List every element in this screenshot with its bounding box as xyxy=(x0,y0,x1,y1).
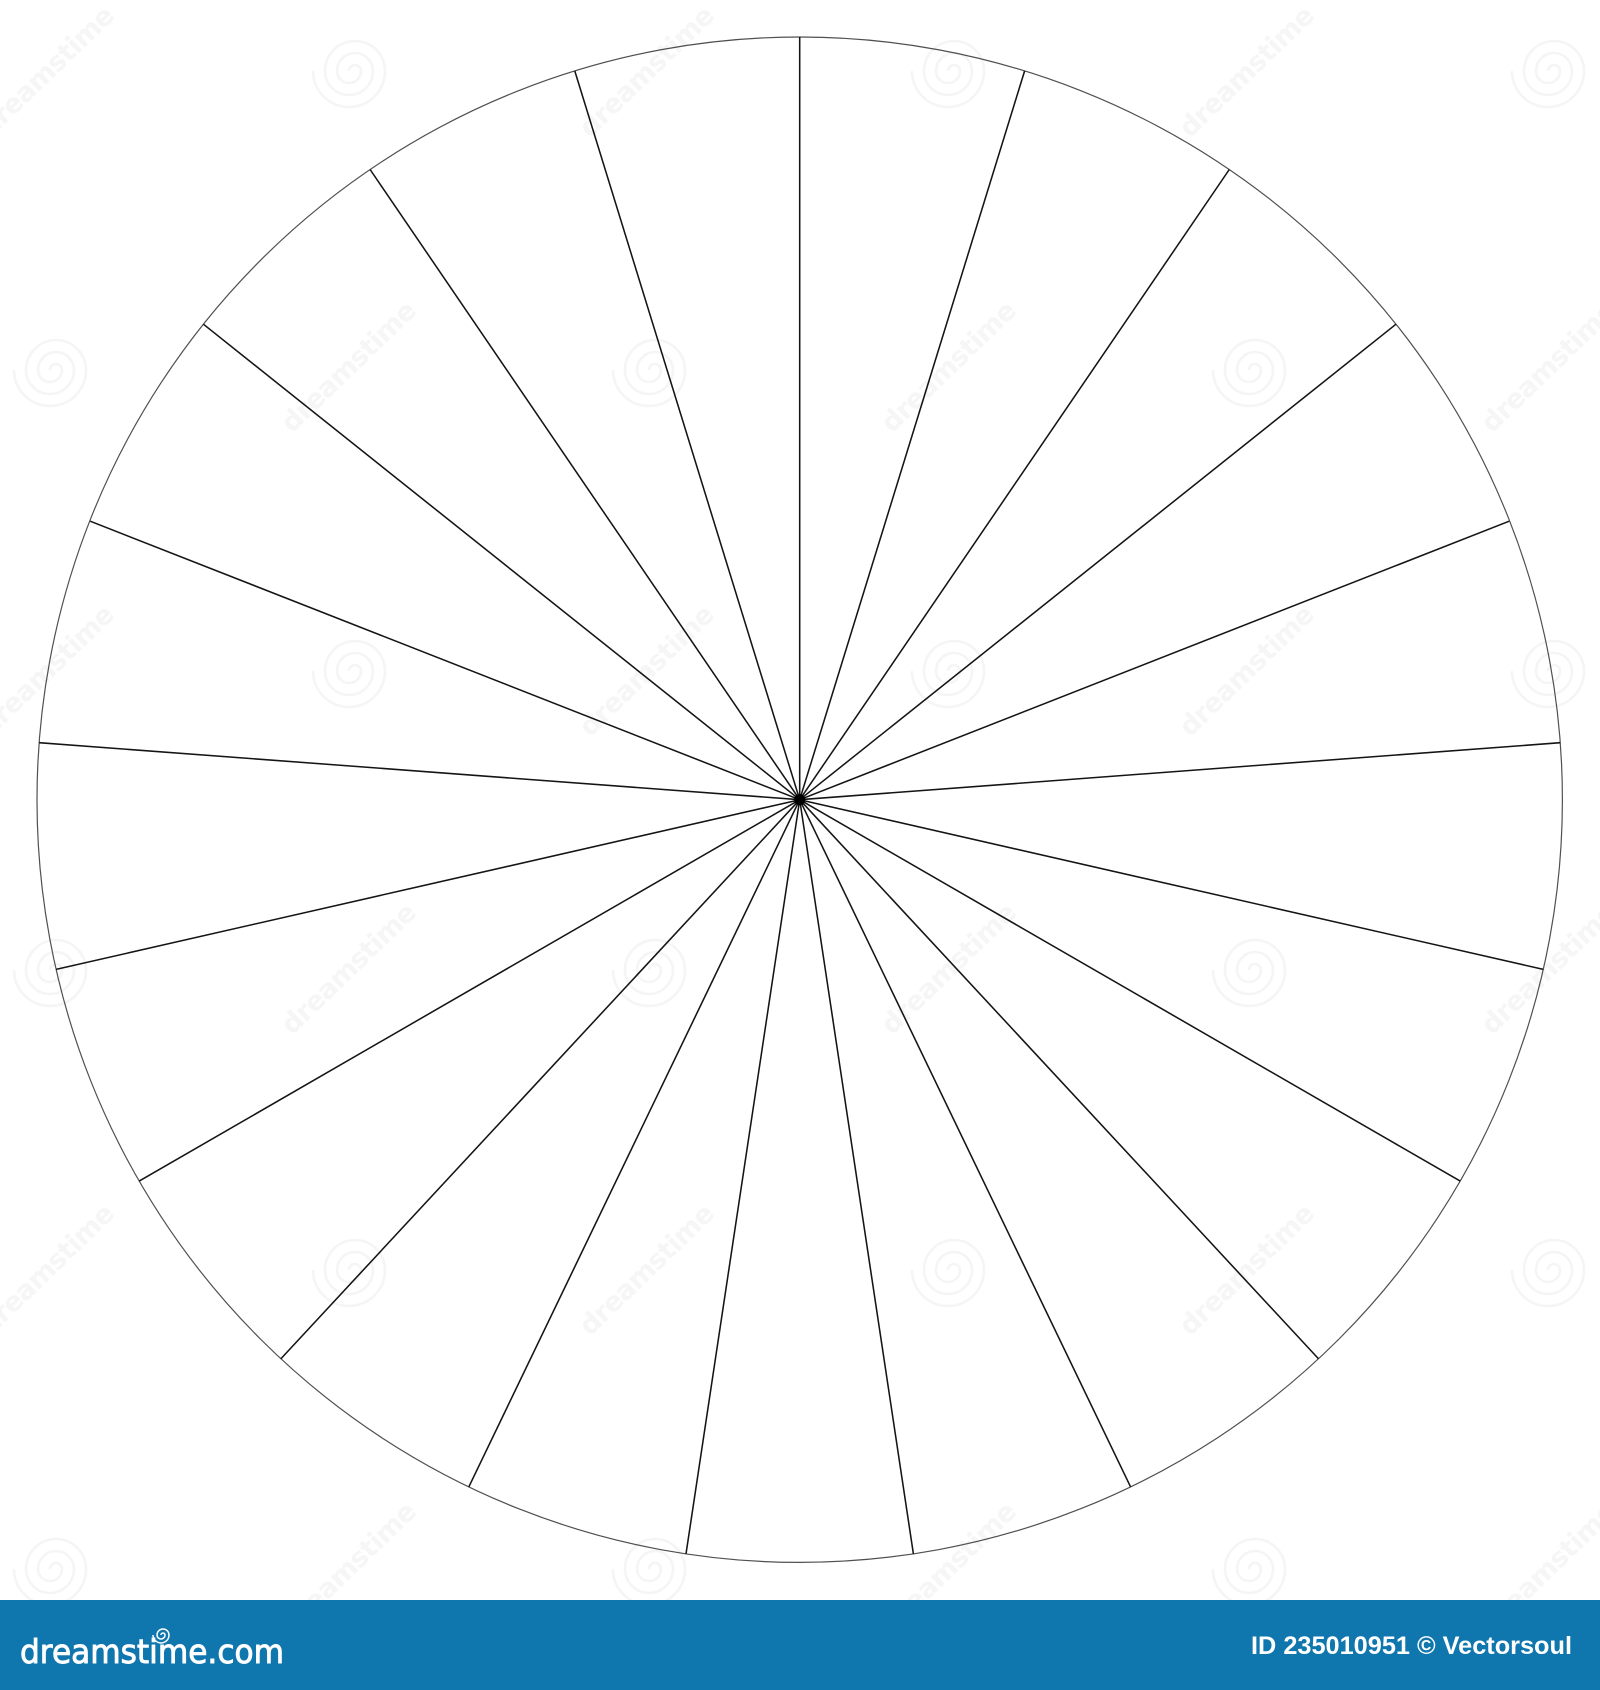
watermark: diagonal wordmarks: dreamstime xyxy=(573,1198,721,1342)
watermark: diagonal wordmarks: dreamstime xyxy=(875,897,1023,1041)
icon: logo spiral xyxy=(153,1629,169,1643)
logo text: dreamstime.com xyxy=(20,1632,284,1671)
watermark: diagonal wordmarks: dreamstime xyxy=(573,599,721,743)
watermark: diagonal wordmarks: dreamstime xyxy=(573,0,721,144)
footer band xyxy=(0,1600,1600,1690)
centre hub xyxy=(794,794,805,805)
watermark: diagonal wordmarks: dreamstime xyxy=(275,295,423,439)
watermark: diagonal wordmarks: dreamstime xyxy=(275,897,423,1041)
image id and credit: ID 235010951 © Vectorsoul xyxy=(1251,1632,1572,1660)
watermark: diagonal wordmarks: dreamstime xyxy=(1173,599,1321,743)
watermark: diagonal wordmarks: dreamstime xyxy=(1173,1198,1321,1342)
watermark: diagonal wordmarks: dreamstime xyxy=(875,295,1023,439)
watermark: diagonal wordmarks: dreamstime xyxy=(875,1496,1023,1640)
watermark: diagonal wordmarks: dreamstime xyxy=(1173,0,1321,144)
watermark: diagonal wordmarks: dreamstime xyxy=(275,1496,423,1640)
